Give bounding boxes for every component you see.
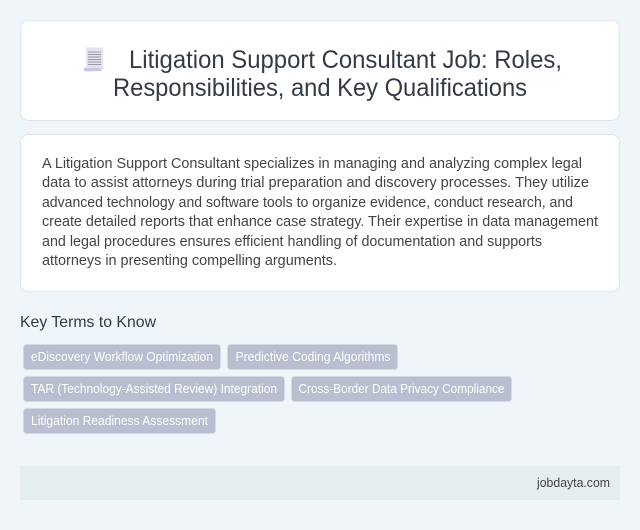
tag: readiness: Litigation Readiness Assessment <box>31 414 209 428</box>
title panel <box>20 20 620 120</box>
tag: eDiscovery <box>24 344 220 370</box>
tag: cross-border: Cross-Border Data Privacy Compliance <box>298 382 505 396</box>
description text: data to assist attorneys during trial preparation and discovery processes. They utilize <box>42 175 589 191</box>
tag: TAR: TAR (Technology-Assisted Review) Integration <box>31 382 277 396</box>
description text: A Litigation Support Consultant specializes in managing and analyzing complex legal <box>42 156 582 172</box>
description text <box>42 156 598 269</box>
footer bar <box>20 466 620 500</box>
icon: document scroll <box>84 48 103 72</box>
tag: readiness <box>24 408 216 434</box>
tag: cross-border <box>292 376 512 402</box>
heading: key terms: Key Terms to Know <box>20 314 156 331</box>
tag: TAR <box>24 376 284 402</box>
description text: and legal procedures ensures efficient handling of documentation and supports <box>42 234 542 250</box>
title text <box>113 46 562 102</box>
tag: eDiscovery: eDiscovery Workflow Optimization <box>31 350 213 364</box>
footer bar: jobdayta.com <box>536 476 610 490</box>
title text: Responsibilities, and Key Qualifications <box>113 74 527 102</box>
title text: Litigation Support Consultant Job: Roles, <box>129 46 562 74</box>
description text: create detailed reports that enhance case strategy. Their expertise in data management <box>42 214 598 230</box>
tag: predictive coding <box>228 344 398 370</box>
description panel <box>20 134 620 292</box>
tag: predictive coding: Predictive Coding Algorithms <box>236 350 390 364</box>
description text: advanced technology and software tools to organize evidence, conduct research, and <box>42 195 573 211</box>
description text: attorneys in presenting compelling arguments. <box>42 253 337 269</box>
